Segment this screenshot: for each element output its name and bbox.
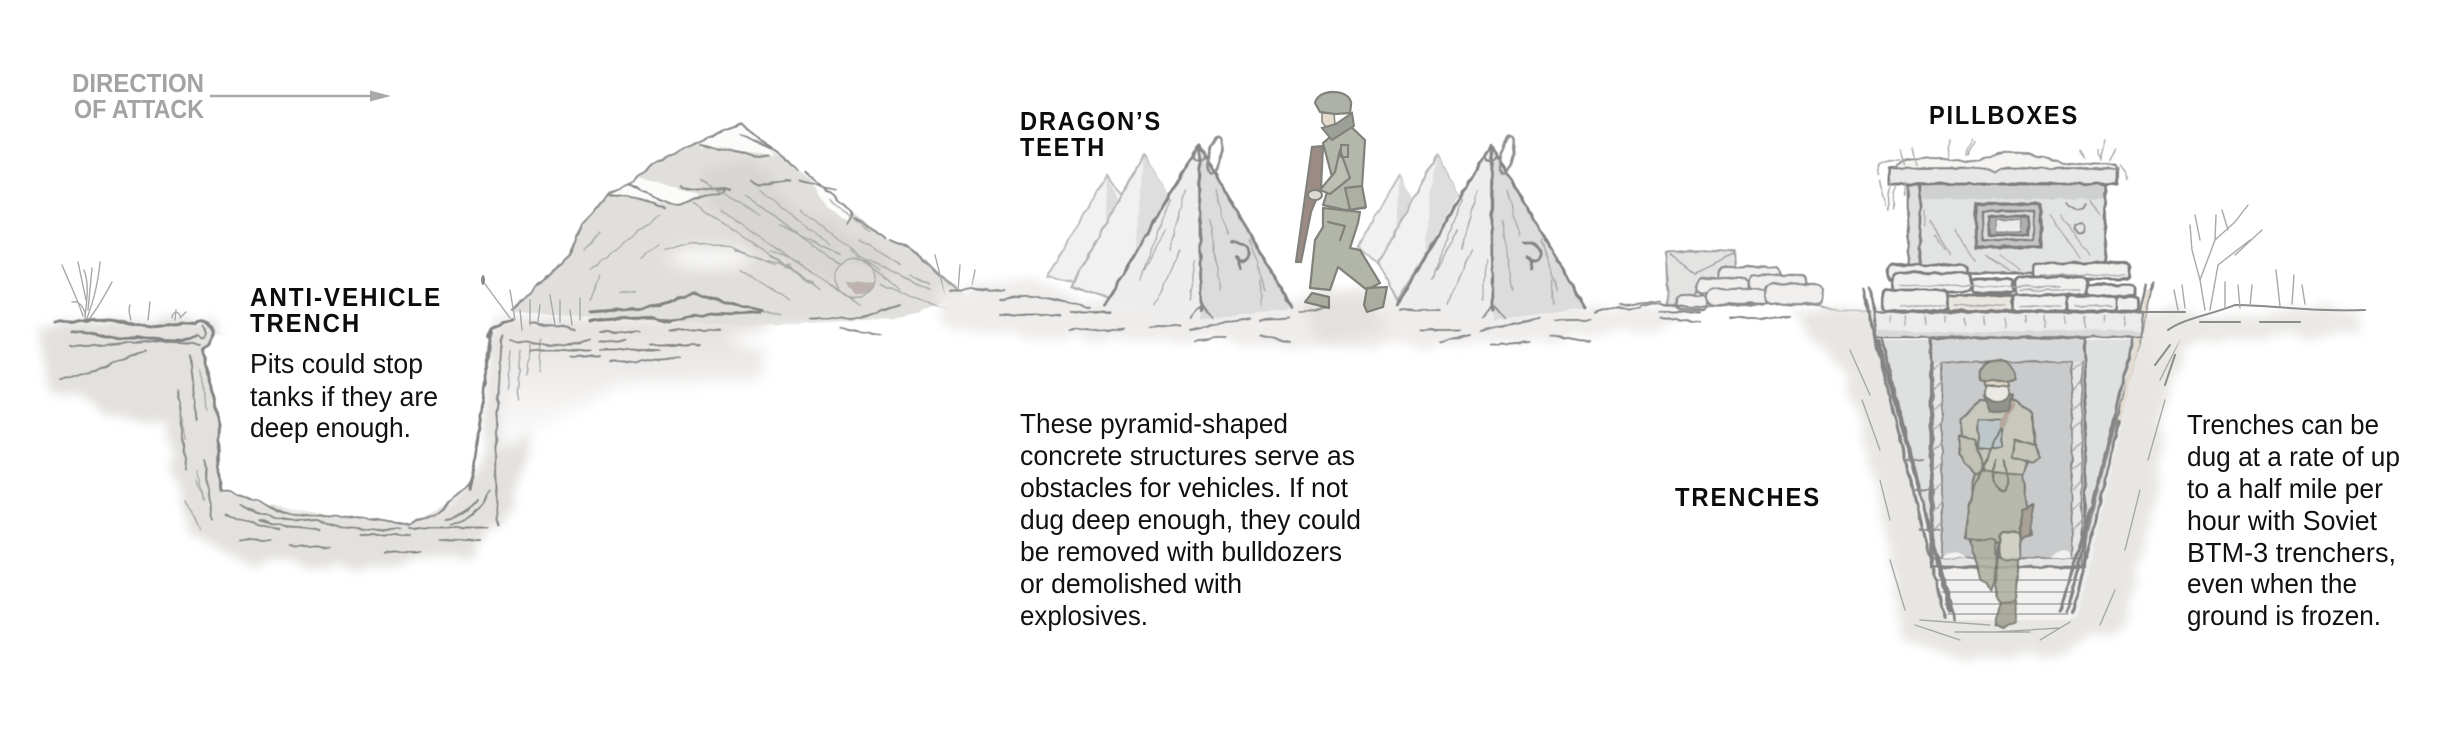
- text block: dragon's teeth description: concrete structures serve as: [1020, 440, 1355, 471]
- firing slit: [1976, 204, 2041, 247]
- ground lines: [2142, 305, 2365, 385]
- sandbags on beam: [1883, 263, 2138, 311]
- text block: dragon's teeth description: or demolished with: [1020, 568, 1242, 599]
- dead bush: [2190, 205, 2262, 310]
- trousers: [1310, 208, 1380, 290]
- back teeth: [1047, 135, 1292, 320]
- illustration: anti-vehicle trench: [40, 250, 770, 568]
- text block: trenches description: to a half mile per: [2187, 473, 2383, 504]
- text block: anti-vehicle trench: ANTI-VEHICLE: [250, 282, 442, 312]
- nearby ground lines: [1640, 303, 1870, 395]
- revetment poles: [1863, 283, 2153, 620]
- illustration: dragon's teeth, right group: [1357, 135, 1585, 320]
- snow and debris on roof: [1895, 152, 2117, 172]
- text block: dragon's teeth description: [1020, 408, 1361, 631]
- thigh pocket: [1328, 222, 1345, 240]
- arrow: direction of attack: [210, 90, 391, 102]
- heading: dragon's teeth: DRAGON’S: [1020, 106, 1162, 136]
- grass on left bank: [62, 262, 186, 320]
- text block: dragon's teeth description: These pyramid-shaped: [1020, 408, 1288, 439]
- reed and grass at mound foot: [482, 255, 975, 330]
- jacket: [1323, 123, 1365, 210]
- mound linework: [510, 124, 958, 362]
- label: direction of attack: OF ATTACK: [74, 94, 204, 124]
- floor: [1932, 567, 2082, 620]
- rock: [831, 264, 875, 296]
- bank wash fading right: [495, 318, 770, 450]
- face: [1322, 113, 1335, 127]
- snow patches: [610, 124, 850, 222]
- text block: trenches description: [2187, 409, 2400, 631]
- text block: anti-vehicle trench: Pits could stop: [250, 348, 423, 379]
- text block: anti-vehicle trench: TRENCH: [250, 308, 361, 338]
- text block: dragon's teeth description: dug deep enough, they could: [1020, 504, 1361, 535]
- text block: trenches description: BTM-3 trenchers,: [2187, 537, 2396, 568]
- ground wash: [940, 282, 1700, 345]
- label: direction of attack: DIRECTION: [72, 68, 204, 98]
- front tooth: [1105, 145, 1201, 320]
- doorway: [1931, 338, 2085, 567]
- text block: anti-vehicle trench: tanks if they are: [250, 381, 438, 412]
- rifle: [1296, 146, 1323, 262]
- beam: [1875, 312, 2142, 337]
- ground linework under teeth: [950, 289, 1700, 345]
- rear post: [1908, 185, 1920, 273]
- trench interior: [1875, 335, 2142, 618]
- text block: anti-vehicle trench: [250, 282, 442, 443]
- illustration: sandbags left of pillbox: [1640, 250, 1870, 395]
- roof slab: [1889, 168, 2117, 184]
- helmet: [1315, 92, 1351, 114]
- earth wash around trench: [40, 322, 530, 568]
- arm and hand: [1320, 150, 1350, 194]
- illustration: earth mound: [481, 124, 975, 362]
- collar: [1322, 113, 1354, 140]
- text block: trenches description: even when the: [2187, 568, 2357, 599]
- bullet marks: [2066, 203, 2086, 233]
- crate: [1666, 250, 1736, 305]
- heading: pillboxes: PILLBOXES: [1929, 100, 2079, 130]
- trench linework: [55, 320, 540, 552]
- earth wash around deep trench: [1790, 310, 2210, 660]
- sandbag stack: [1677, 267, 1823, 310]
- illustration: ground strip: [940, 282, 1700, 345]
- text block: dragon's teeth description: be removed with bulldozers: [1020, 536, 1342, 567]
- text block: trenches description: Trenches can be: [2187, 409, 2379, 440]
- fade at mound foot: [730, 326, 970, 354]
- illustration: trench with pillbox: [1790, 140, 2210, 660]
- heading: trenches: TRENCHES: [1675, 482, 1821, 512]
- wall: [1920, 183, 2105, 273]
- grass: [2174, 270, 2305, 310]
- pillbox: [1877, 140, 2138, 311]
- label: direction of attack: [72, 68, 204, 124]
- side panels: [1880, 340, 2138, 590]
- back teeth: [1357, 135, 1585, 320]
- heading: dragon's teeth: [1020, 106, 1162, 162]
- text block: trenches description: dug at a rate of up: [2187, 441, 2400, 472]
- trench void: [205, 250, 500, 525]
- text block: dragon's teeth description: explosives.: [1020, 600, 1148, 631]
- pouch: [1345, 186, 1366, 210]
- text block: trenches description: ground is frozen.: [2187, 600, 2381, 631]
- mound body: [512, 124, 965, 326]
- illustration: dragon's teeth, left group: [1047, 135, 1292, 320]
- ground wash: [2150, 308, 2365, 360]
- heading: dragon's teeth: TEETH: [1020, 132, 1106, 162]
- boots: [1364, 287, 1387, 312]
- text block: anti-vehicle trench: deep enough.: [250, 412, 411, 443]
- front tooth: [1397, 145, 1493, 320]
- text block: dragon's teeth description: obstacles for vehicles. If not: [1020, 472, 1348, 503]
- soldier in trench: [1960, 360, 2040, 628]
- shoulder patch: [1341, 145, 1348, 157]
- mound shading: [700, 160, 890, 290]
- illustration: right bank: [2142, 205, 2365, 385]
- text block: trenches description: hour with Soviet: [2187, 505, 2377, 536]
- illustration: walking soldier: [1296, 92, 1387, 312]
- trench wall hatching: [1850, 340, 2180, 640]
